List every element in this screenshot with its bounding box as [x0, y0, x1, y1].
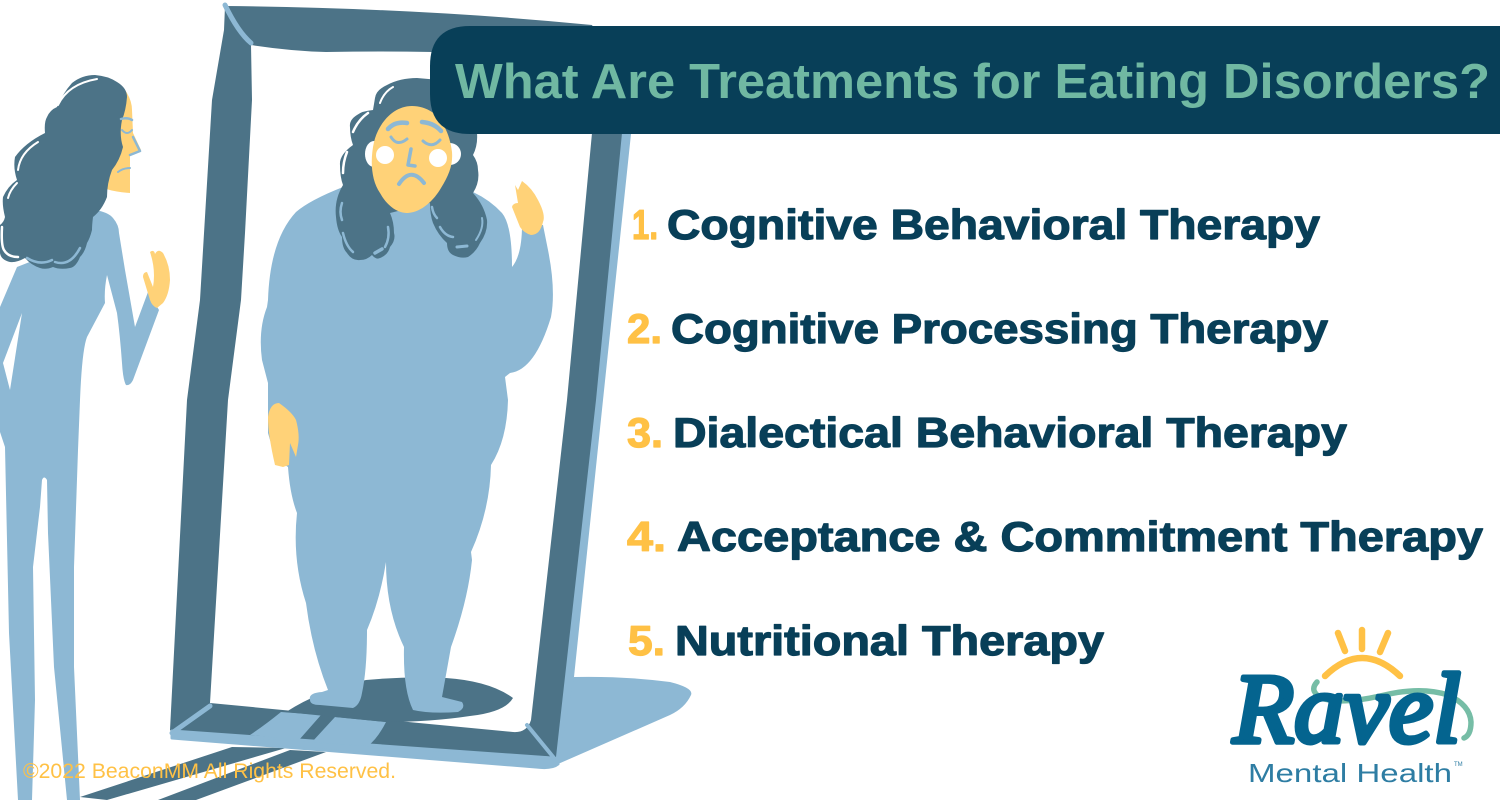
ears	[365, 141, 461, 167]
logo wave	[1314, 682, 1471, 738]
item 3: 3.	[627, 409, 663, 456]
foreground hair highlights	[2, 79, 97, 257]
copyright: ©2022 BeaconMM All Rights Reserved.	[23, 760, 396, 783]
reflection hair	[336, 78, 487, 260]
lowered hand	[268, 403, 299, 467]
title text: What Are Treatments for Eating Disorders?	[455, 55, 1490, 109]
trademark: TM	[1454, 762, 1463, 768]
foreground hair lower highlights	[27, 248, 80, 263]
floor shadow behind mirror	[545, 677, 691, 764]
foreground face	[106, 90, 141, 193]
item 1: 1.	[632, 201, 658, 248]
foreground facial features	[118, 118, 140, 172]
banner background	[430, 26, 1500, 134]
foreground hand	[143, 251, 170, 308]
white gap between arm and torso	[3, 313, 22, 390]
foreground body	[0, 210, 159, 800]
foreground hair	[0, 75, 127, 269]
raised hand	[512, 181, 544, 235]
reflection body	[261, 187, 553, 713]
logo tagline: Mental Health	[1248, 758, 1452, 788]
mirror reflection figure	[261, 78, 553, 713]
foreground figure from behind	[0, 75, 170, 800]
hair highlights	[340, 87, 482, 253]
item 4: Acceptance & Commitment Therapy	[677, 513, 1484, 560]
item 3: Dialectical Behavioral Therapy	[673, 409, 1348, 456]
item 5: Nutritional Therapy	[675, 617, 1105, 664]
face	[372, 106, 452, 213]
cheeks	[376, 146, 447, 167]
item 2: Cognitive Processing Therapy	[671, 305, 1329, 352]
floor shadow under figure	[286, 677, 513, 722]
logo wordmark: Ravel	[1232, 653, 1461, 764]
illustration: woman looking in mirror	[0, 5, 691, 800]
mirror frame	[170, 5, 631, 768]
item 1: Cognitive Behavioral Therapy	[667, 201, 1321, 248]
diagonal mirror shadows on floor	[80, 747, 326, 800]
item 5: 5.	[628, 617, 665, 664]
list of treatments	[627, 201, 1484, 664]
item 4: 4.	[627, 513, 666, 560]
facial features	[388, 122, 441, 184]
logo: Ravel Mental Health	[1232, 630, 1471, 788]
logo sun	[1325, 630, 1400, 676]
item 2: 2.	[627, 305, 662, 352]
title banner	[430, 26, 1500, 134]
